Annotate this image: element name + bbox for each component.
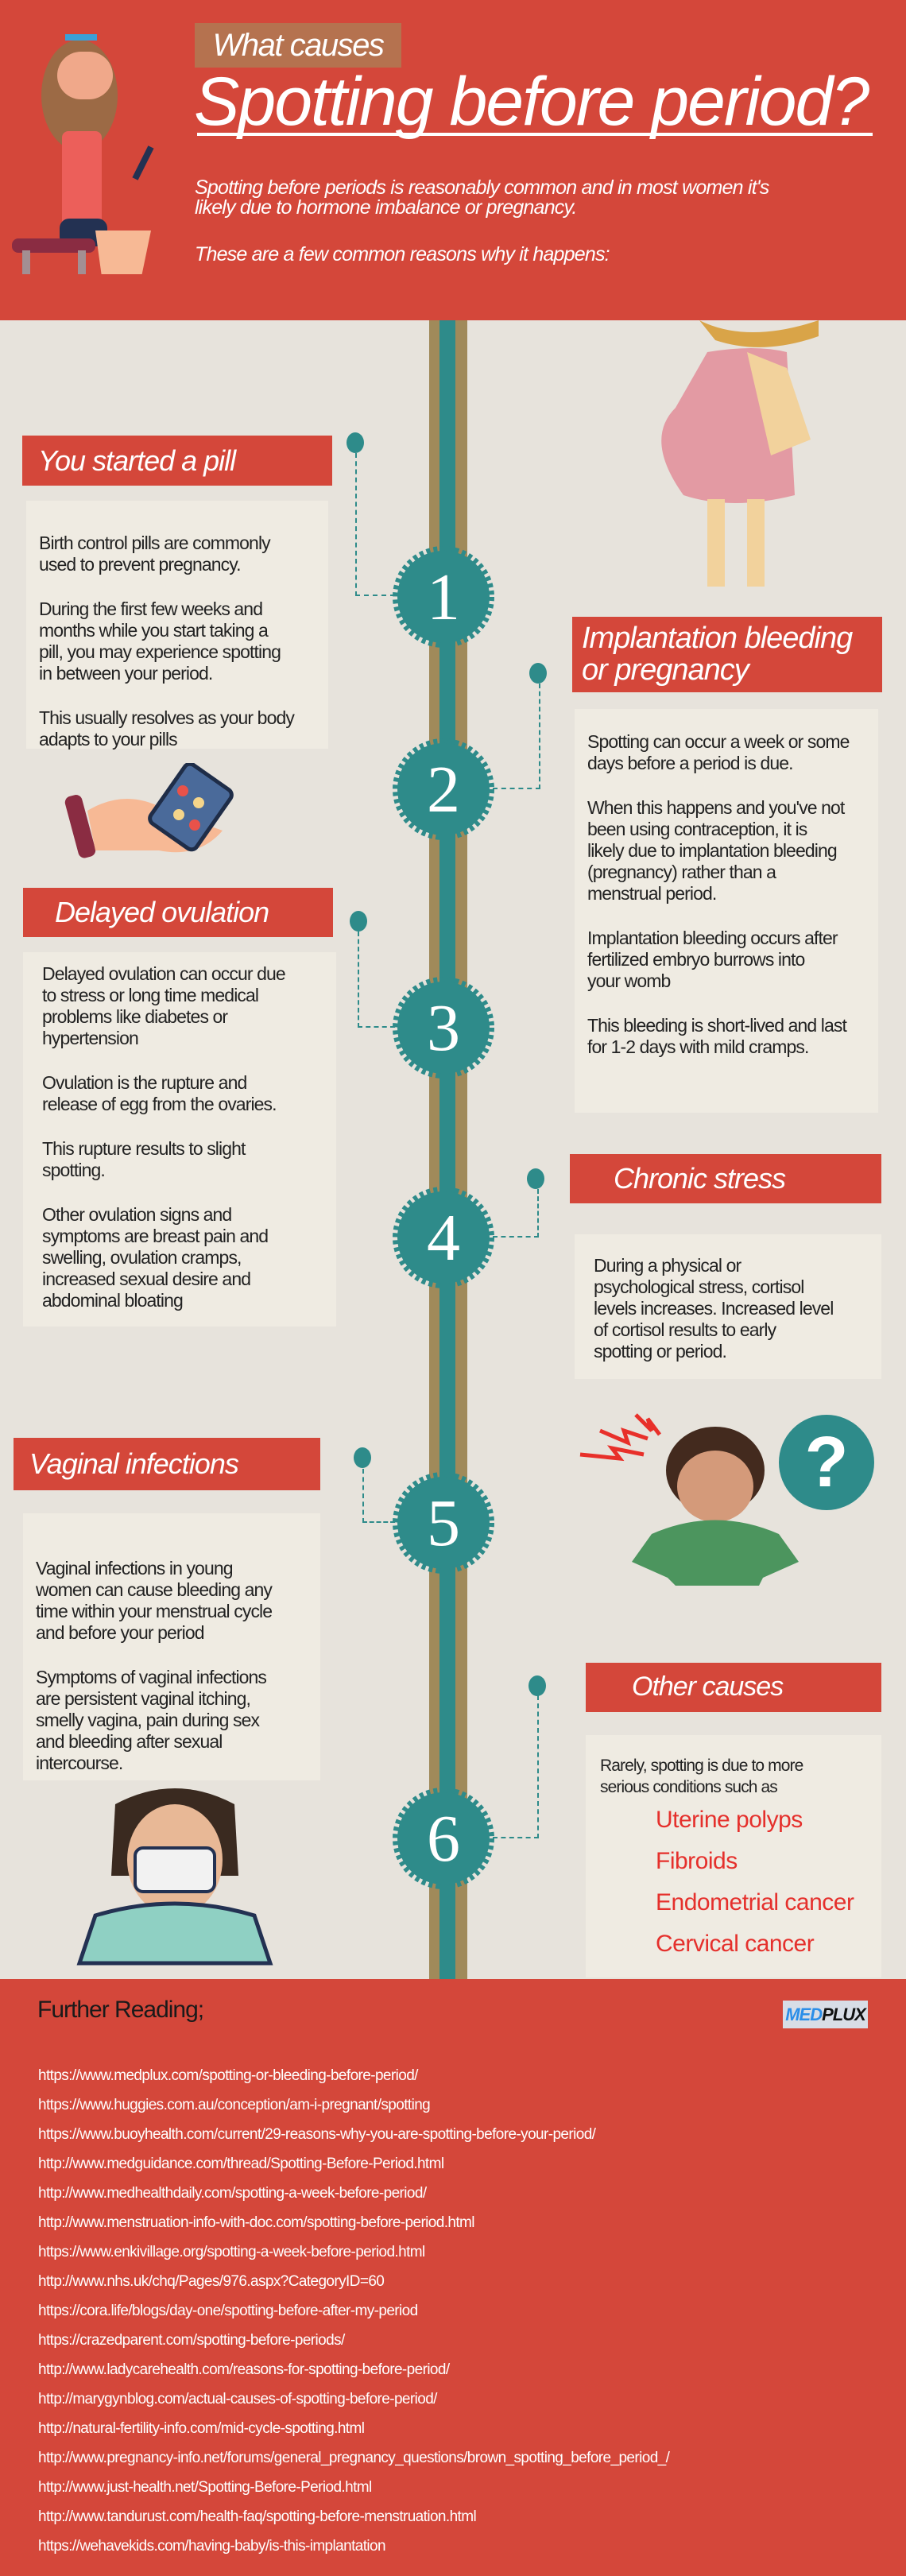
- heading: further reading: Further Reading;: [37, 1997, 203, 2023]
- panel: pill text: in between your period.: [39, 663, 212, 684]
- panel: implantation text: been using contraception, it is: [587, 819, 807, 839]
- number 4: [396, 1190, 491, 1285]
- list: conditions: Fibroids: [656, 1848, 738, 1874]
- title: what causes: [195, 23, 401, 68]
- panel: pill text: During the first few weeks and: [39, 598, 262, 619]
- panel: infections text: intercourse.: [36, 1753, 122, 1773]
- panel: implantation text: Implantation bleeding occurs after: [587, 928, 838, 948]
- panel: stress text: spotting or period.: [594, 1341, 726, 1362]
- list: conditions: Endometrial cancer: [656, 1889, 854, 1916]
- list: urls: https://www.enkivillage.org/spotting-a-week-before-period.html: [38, 2244, 425, 2260]
- number 1: 1: [427, 560, 460, 634]
- panel: ovulation text: This rupture results to slight: [42, 1138, 246, 1159]
- panel: other causes: Rarely, spotting is due to more: [600, 1757, 803, 1775]
- list: urls: https://wehavekids.com/having-baby/is-this-implantation: [38, 2538, 385, 2555]
- panel: infections text: and bleeding after sexual: [36, 1731, 223, 1752]
- list: urls: https://crazedparent.com/spotting-before-periods/: [38, 2332, 345, 2349]
- panel: stress text: During a physical or: [594, 1255, 741, 1276]
- panel: infections text: Vaginal infections in young: [36, 1558, 233, 1579]
- beige body: [0, 320, 906, 1979]
- number 4: 4: [427, 1201, 460, 1275]
- panel: implantation text: likely due to implantation bleeding: [587, 840, 837, 861]
- number 2: 2: [427, 753, 460, 827]
- panel: stress text: [575, 1234, 881, 1379]
- list: urls: http://www.medguidance.com/thread/Spotting-Before-Period.html: [38, 2156, 443, 2172]
- logo: medplux: MEDPLUX: [785, 2005, 865, 2024]
- intro text 2: These are a few common reasons why it happens:: [195, 243, 610, 265]
- panel: implantation text: menstrual period.: [587, 883, 716, 904]
- panel: ovulation text: swelling, ovulation cramps,: [42, 1247, 242, 1268]
- number 3: [396, 980, 491, 1075]
- panel: ovulation text: release of egg from the ovaries.: [42, 1094, 277, 1114]
- panel: infections text: women can cause bleeding any: [36, 1579, 272, 1600]
- panel: pill text: months while you start taking a: [39, 620, 268, 641]
- list: urls: https://www.buoyhealth.com/current/29-reasons-why-you-are-spotting-before-your-period/: [38, 2126, 595, 2143]
- panel: other causes: serious conditions such as: [600, 1778, 777, 1796]
- number 3: 3: [427, 991, 460, 1065]
- panel: implantation text: for 1-2 days with mild cramps.: [587, 1036, 808, 1057]
- heading: you started a pill: You started a pill: [38, 444, 235, 477]
- number 6: [396, 1791, 491, 1886]
- panel: pill text: Birth control pills are commonly: [39, 533, 270, 553]
- list: urls: http://www.medhealthdaily.com/spotting-a-week-before-period/: [38, 2185, 427, 2202]
- list: conditions: Uterine polyps: [656, 1807, 803, 1833]
- heading: chronic stress: [570, 1154, 881, 1203]
- illustration: hand with pills: [65, 763, 234, 858]
- number 5: [396, 1475, 491, 1571]
- panel: pill text: [26, 501, 328, 749]
- panel: stress text: levels increases. Increased level: [594, 1298, 833, 1319]
- panel: pill text: pill, you may experience spotting: [39, 641, 281, 662]
- illustration: stressed woman: [580, 1413, 874, 1586]
- panel: implantation text: This bleeding is short-lived and last: [587, 1015, 846, 1036]
- heading: chronic stress: Chronic stress: [614, 1162, 785, 1195]
- panel: infections text: are persistent vaginal itching,: [36, 1688, 250, 1709]
- panel: pill text: used to prevent pregnancy.: [39, 554, 241, 575]
- list: urls: [38, 2067, 670, 2555]
- heading: other causes: [586, 1663, 881, 1712]
- panel: infections text: [23, 1513, 320, 1780]
- list: urls: http://marygynblog.com/actual-causes-of-spotting-before-period/: [38, 2391, 437, 2407]
- panel: ovulation text: problems like diabetes or: [42, 1006, 227, 1027]
- illustration: doctor: [76, 1788, 273, 1965]
- panel: implantation text: Spotting can occur a week or some: [587, 731, 850, 752]
- list: urls: http://www.pregnancy-info.net/forums/general_pregnancy_questions/brown_spotting_before_period_/: [38, 2450, 669, 2466]
- panel: implantation text: (pregnancy) rather than a: [587, 862, 776, 882]
- number 6: 6: [427, 1802, 460, 1876]
- panel: implantation text: When this happens and you've not: [587, 797, 844, 818]
- panel: infections text: time within your menstrual cycle: [36, 1601, 272, 1621]
- header band: [0, 0, 906, 320]
- title: main: Spotting before period?: [194, 64, 868, 140]
- logo: medplux: [783, 2001, 868, 2028]
- number 1: [396, 549, 491, 645]
- panel: ovulation text: Other ovulation signs and: [42, 1204, 231, 1225]
- number 2: [396, 742, 491, 837]
- list: conditions: Cervical cancer: [656, 1931, 814, 1957]
- panel: ovulation text: abdominal bloating: [42, 1290, 183, 1311]
- heading: other causes: Other causes: [632, 1671, 783, 1702]
- panel: ovulation text: spotting.: [42, 1160, 105, 1180]
- panel: ovulation text: Ovulation is the rupture and: [42, 1072, 246, 1093]
- panel: other causes: [586, 1735, 881, 1978]
- panel: ovulation text: hypertension: [42, 1028, 138, 1048]
- intro text: Spotting before periods is reasonably common and in most women it's: [195, 176, 769, 199]
- title: what causes: What causes: [213, 28, 383, 63]
- panel: pill text: This usually resolves as your body: [39, 707, 294, 728]
- footer: [0, 1979, 906, 2576]
- panel: implantation text: days before a period is due.: [587, 753, 793, 773]
- heading: vaginal infections: Vaginal infections: [29, 1447, 238, 1480]
- list: urls: http://www.just-health.net/Spotting-Before-Period.html: [38, 2479, 372, 2496]
- panel: ovulation text: symptoms are breast pain and: [42, 1226, 268, 1246]
- heading: delayed ovulation: Delayed ovulation: [55, 896, 269, 928]
- panel: pill text: adapts to your pills: [39, 729, 177, 750]
- list: urls: http://www.ladycarehealth.com/reasons-for-spotting-before-period/: [38, 2361, 450, 2378]
- panel: implantation text: [575, 709, 878, 1113]
- panel: implantation text: your womb: [587, 970, 670, 991]
- panel: stress text: psychological stress, cortisol: [594, 1276, 803, 1297]
- panel: implantation text: fertilized embryo burrows into: [587, 949, 804, 970]
- list: urls: http://www.tandurust.com/health-faq/spotting-before-menstruation.html: [38, 2508, 476, 2525]
- list: urls: http://www.menstruation-info-with-doc.com/spotting-before-period.html: [38, 2214, 474, 2231]
- list: urls: https://cora.life/blogs/day-one/spotting-before-after-my-period: [38, 2303, 418, 2319]
- illustration: stressed woman: ?: [805, 1423, 848, 1502]
- list: urls: http://natural-fertility-info.com/mid-cycle-spotting.html: [38, 2420, 364, 2437]
- list: urls: https://www.huggies.com.au/conception/am-i-pregnant/spotting: [38, 2097, 430, 2113]
- number 5: 5: [427, 1486, 460, 1560]
- panel: ovulation text: Delayed ovulation can occur due: [42, 963, 285, 984]
- list: urls: http://www.nhs.uk/chq/Pages/976.aspx?CategoryID=60: [38, 2273, 384, 2290]
- intro text: likely due to hormone imbalance or pregnancy.: [195, 196, 577, 219]
- list: urls: https://www.medplux.com/spotting-or-bleeding-before-period/: [38, 2067, 418, 2084]
- spine: [429, 320, 467, 2053]
- intro text: [195, 176, 769, 219]
- panel: ovulation text: [23, 952, 336, 1327]
- panel: infections text: Symptoms of vaginal infections: [36, 1667, 266, 1687]
- panel: ovulation text: to stress or long time medical: [42, 985, 258, 1005]
- heading: implantation bleeding: Implantation bleeding or pregnancy: [582, 622, 852, 687]
- list: conditions: [656, 1807, 854, 1957]
- panel: infections text: smelly vagina, pain during sex: [36, 1710, 259, 1730]
- panel: infections text: and before your period: [36, 1622, 204, 1643]
- heading: vaginal infections: [14, 1438, 320, 1490]
- heading: delayed ovulation: [23, 888, 333, 937]
- illustration: pregnant woman: [661, 320, 819, 587]
- panel: stress text: of cortisol results to early: [594, 1319, 776, 1340]
- panel: ovulation text: increased sexual desire and: [42, 1269, 250, 1289]
- connectors: [355, 453, 395, 596]
- illustration: woman on stool: [12, 34, 154, 274]
- heading: you started a pill: [22, 436, 332, 486]
